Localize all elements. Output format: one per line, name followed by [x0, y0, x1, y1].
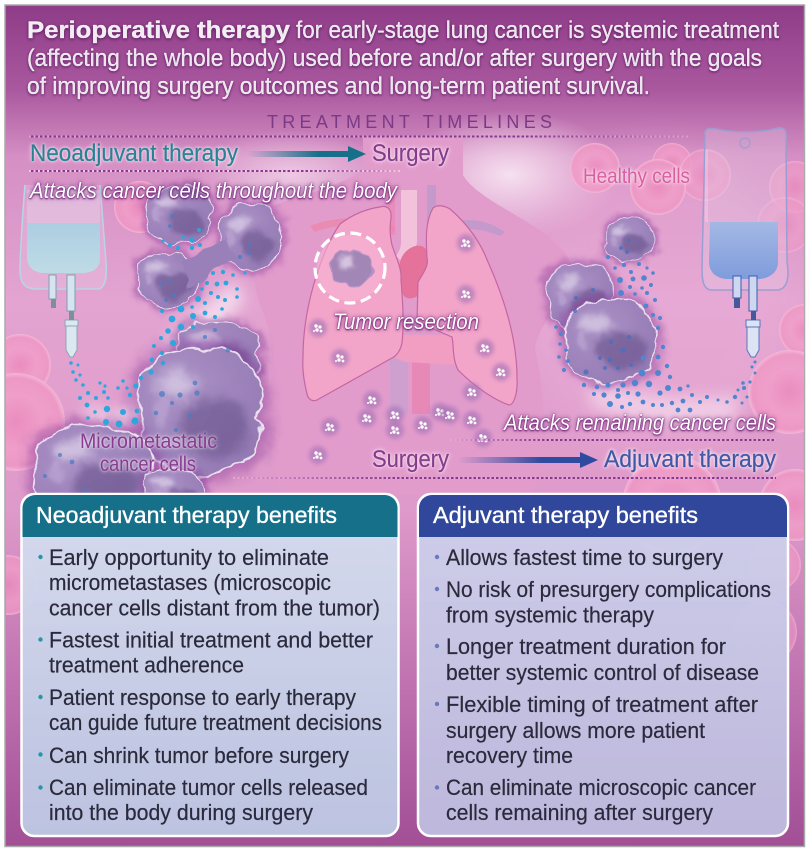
benefits list: Can eliminate tumor cells released: [49, 775, 368, 800]
benefits list: better systemic control of disease: [446, 660, 759, 685]
benefits list: Longer treatment duration for: [446, 634, 726, 659]
panel top header: [27, 17, 779, 100]
label: micrometastatic cancer cells: [80, 430, 217, 476]
arrow: neoadjuvant to surgery: [247, 146, 366, 162]
neoadjuvant timeline: [29, 136, 689, 172]
arrow: surgery to adjuvant: [458, 452, 598, 468]
left IV bag: [20, 185, 106, 357]
benefits list: Fastest initial treatment and better: [49, 628, 373, 652]
cancer cells (right): [542, 214, 663, 388]
benefits list: cells remaining after surgery: [446, 800, 713, 825]
left-side lung on page: [303, 206, 403, 401]
benefits list: micrometastases (microscopic: [49, 570, 331, 595]
benefits list: can guide future treatment decisions: [49, 710, 382, 735]
benefits list: No risk of presurgery complications: [446, 577, 771, 602]
label: tumor resection: Tumor resection: [333, 309, 479, 334]
left glow behind drug dots: [85, 280, 245, 429]
panel header: [419, 495, 787, 537]
panel title: Neoadjuvant therapy benefits: [36, 502, 337, 528]
label: adjuvant therapy: Adjuvant therapy: [604, 446, 776, 473]
body silhouette: [253, 137, 572, 495]
caption: attacks remaining cancer cells: Attacks remaining cancer cells: [502, 410, 776, 435]
drug dots right (blue): [554, 255, 756, 412]
benefits list: into the body during surgery: [49, 800, 313, 825]
right IV bag: [702, 128, 788, 357]
drug dots left (teal blue): [69, 228, 247, 427]
panel top header: for early-stage lung cancer is systemic treatment: [296, 17, 779, 44]
panel: neoadjuvant therapy benefits: [22, 494, 398, 836]
panel top header: (affecting the whole body) used before and/or after surgery with the goals: [27, 45, 762, 72]
lower central tissue: [393, 335, 458, 365]
label: micrometastatic cancer cells: cancer cells: [100, 453, 196, 476]
healthy cells background: [0, 143, 810, 664]
label: surgery: Surgery: [372, 140, 449, 167]
lungs illustration: [303, 185, 517, 464]
panel title: Adjuvant therapy benefits: [433, 502, 698, 528]
benefits list: recovery time: [446, 743, 573, 768]
panel header: [22, 495, 398, 537]
dashed resection circle: [315, 233, 385, 303]
label: micrometastatic cancer cells: Micrometastatic: [80, 430, 217, 453]
drug dots inside left cells: [43, 214, 252, 492]
tumor: [317, 235, 383, 301]
label: healthy cells: Healthy cells: [583, 165, 690, 188]
right-side lung on page: [417, 206, 517, 405]
panel top header: of improving surgery outcomes and long-term patient survival.: [27, 73, 650, 100]
caption: attacks cancer cells throughout the body: Attacks cancer cells throughout the body: [28, 178, 399, 203]
trachea: [396, 190, 417, 262]
heading: treatment timelines: TREATMENT TIMELINES: [267, 112, 552, 132]
benefits list: Early opportunity to eliminate: [49, 545, 329, 570]
benefits list: treatment adherence: [49, 652, 244, 678]
label: neoadjuvant therapy: Neoadjuvant therapy: [30, 140, 238, 167]
benefits list: Patient response to early therapy: [49, 685, 356, 710]
benefits list: Allows fastest time to surgery: [446, 545, 723, 570]
benefits list: cancer cells distant from the tumor): [49, 596, 380, 620]
benefits list: Can eliminate microscopic cancer: [446, 775, 756, 800]
great vessels: [310, 185, 505, 414]
benefits list: [435, 545, 771, 825]
right glow behind drug dots: [590, 380, 740, 424]
tumor cell clusters: [309, 234, 510, 464]
panel: adjuvant therapy benefits: [418, 494, 788, 836]
label: surgery: Surgery: [372, 446, 449, 473]
benefits list: surgery allows more patient: [446, 718, 705, 743]
micrometastatic cancer cells (left): [26, 183, 287, 526]
benefits list: from systemic therapy: [446, 602, 654, 628]
benefits list: [38, 545, 382, 825]
adjuvant timeline: [233, 439, 776, 479]
heart: [399, 246, 429, 298]
benefits list: Can shrink tumor before surgery: [49, 743, 349, 768]
panel top header: Perioperative therapy: [27, 17, 290, 44]
benefits list: Flexible timing of treatment after: [446, 692, 758, 717]
